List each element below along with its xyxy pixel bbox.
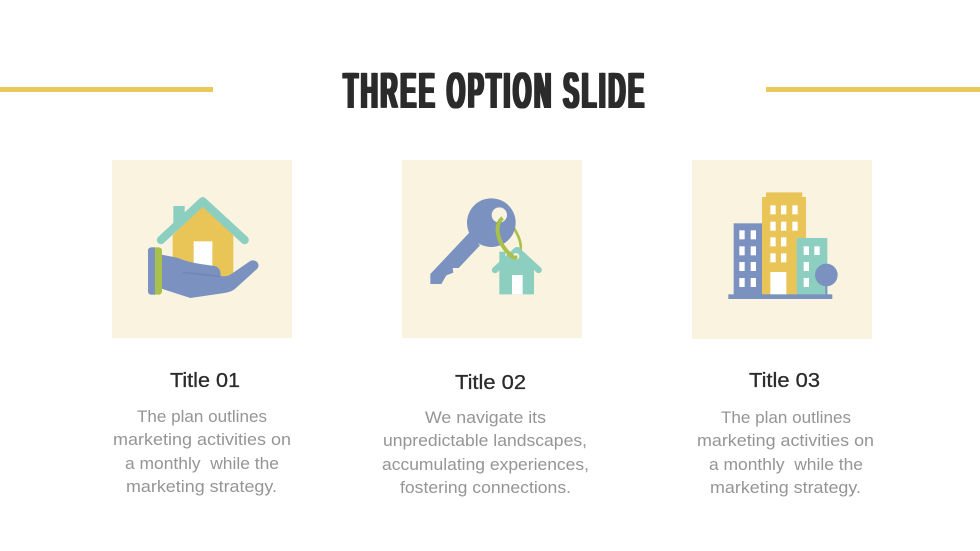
text block: option 2 description: unpredictable landscapes, [383,431,587,450]
panel: option 3 [692,160,874,497]
text block: option 3 description: The plan outlines [721,408,851,427]
icon tile 1 [112,160,292,338]
icon: city buildings [728,192,838,299]
text block: option 2 description: We navigate its [425,408,546,427]
heading: title 01: Title 01 [170,370,240,392]
icon: key with house keyring [430,198,539,294]
text block: option 1 description: The plan outlines [137,407,267,426]
heading: title 02: Title 02 [455,372,526,394]
text block: option 2 description: fostering connections. [400,478,571,497]
panel: option 1 [112,160,292,496]
text block: option 1 description: marketing strategy. [126,477,277,496]
text block: option 3 description [697,408,874,497]
text block: option 3 description: a monthly while the [709,455,863,474]
title: THREE OPTION SLIDE [342,62,645,119]
icon tile 3 [692,160,872,339]
panel: option 2 [382,160,589,497]
icon: house in hand [148,201,258,298]
text block: option 3 description: marketing activities on [697,431,874,450]
text block: option 1 description: a monthly while the [125,454,279,473]
text block: option 3 description: marketing strategy. [710,478,861,497]
text block: option 2 description [382,408,589,497]
left accent bar [0,87,213,92]
heading: title 03: Title 03 [749,370,820,392]
right accent bar [766,87,980,92]
text block: option 2 description: accumulating experiences, [382,455,589,474]
text block: option 1 description [113,407,291,496]
icon tile 2 [402,160,582,338]
text block: option 1 description: marketing activities on [113,430,291,449]
